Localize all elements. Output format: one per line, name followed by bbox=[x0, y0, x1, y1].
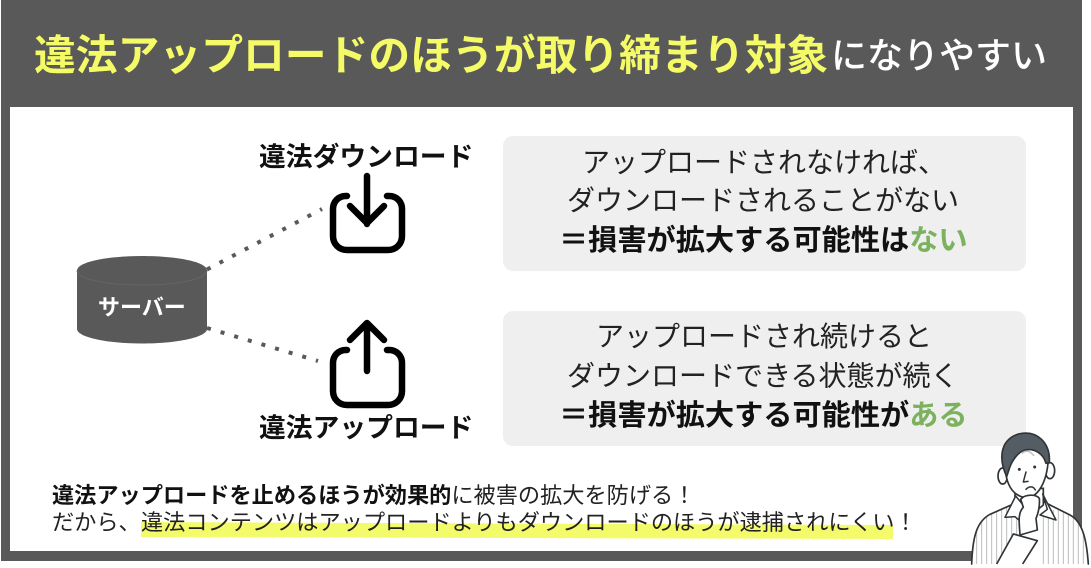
title: になりやすい bbox=[831, 35, 1047, 76]
panel: upload continues, download continues bbox=[503, 311, 1026, 446]
dotted line to download bbox=[207, 209, 322, 270]
icon: download bbox=[333, 176, 402, 250]
panel: upload continues, download continues: アップロードされ続けると bbox=[596, 321, 932, 352]
panel: no upload, no download: ＝損害が拡大する可能性はない bbox=[559, 223, 968, 257]
label: illegal download: 違法ダウンロード bbox=[259, 141, 473, 172]
dotted line to upload bbox=[207, 328, 318, 361]
white content panel bbox=[10, 107, 1073, 551]
panel: no upload, no download: ダウンロードされることがない bbox=[567, 185, 959, 216]
highlight marker bbox=[141, 522, 893, 539]
panel: no upload, no download: アップロードされなければ、 bbox=[582, 147, 946, 178]
icon: thinking man bbox=[972, 433, 1088, 564]
panel: upload continues, download continues: ダウンロードできる状態が続く bbox=[567, 360, 958, 392]
server cylinder bbox=[77, 256, 207, 344]
conclusion text bbox=[52, 482, 917, 535]
icon: upload bbox=[333, 323, 402, 405]
conclusion text: 違法アップロードを止めるほうが効果的に被害の拡大を防げる！ bbox=[52, 482, 695, 508]
panel: upload continues, download continues: ＝損害が拡大する可能性がある bbox=[559, 398, 968, 432]
conclusion text: だから、 bbox=[52, 510, 141, 535]
label: illegal upload: 違法アップロード bbox=[259, 413, 473, 443]
conclusion text: 違法コンテンツはアップロードよりもダウンロードのほうが逮捕されにくい！ bbox=[141, 510, 917, 535]
server cylinder: サーバー bbox=[98, 295, 186, 320]
title: 違法アップロードのほうが取り締まり対象 bbox=[34, 32, 828, 79]
panel: no upload, no download bbox=[503, 136, 1026, 271]
